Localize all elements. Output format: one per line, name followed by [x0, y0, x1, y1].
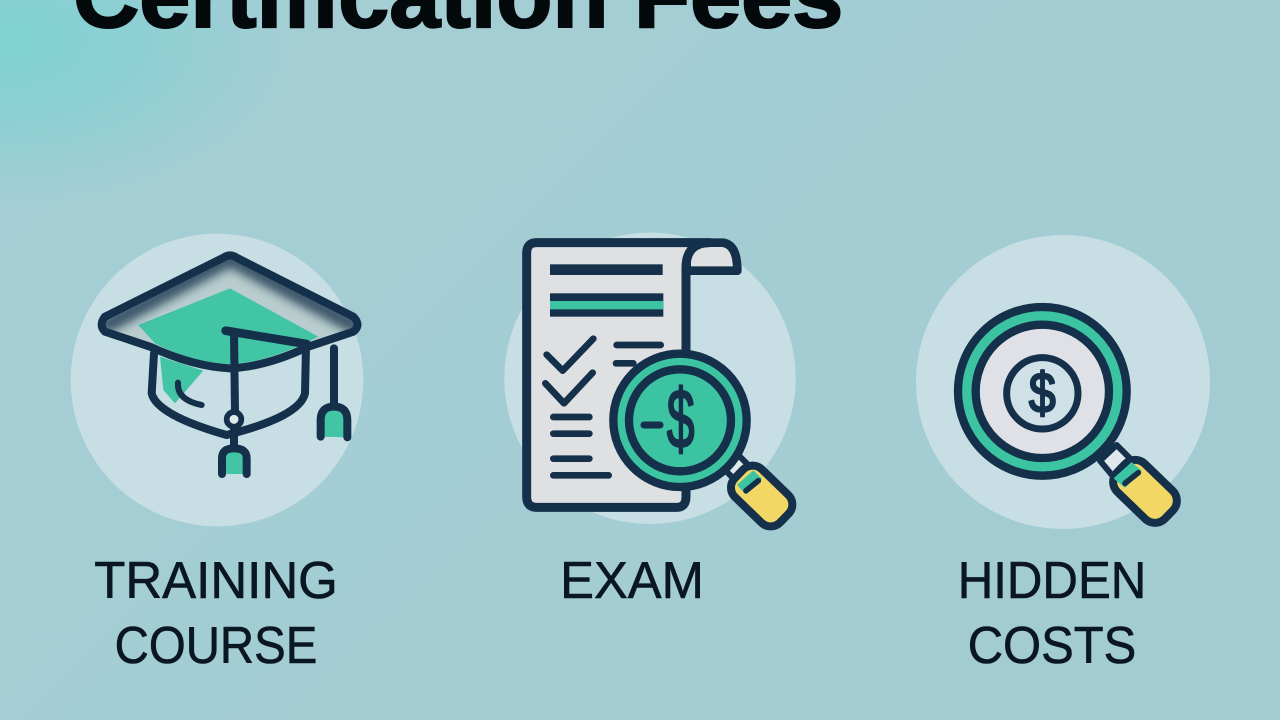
label: hidden costs: COSTS	[968, 616, 1136, 674]
icon: graduation cap	[71, 234, 363, 526]
icon: exam document with magnifier	[504, 233, 798, 532]
magnifier lens: $	[667, 372, 695, 466]
icons	[70, 232, 1210, 530]
icon: magnifier with coin	[916, 235, 1210, 529]
magnifier lens	[613, 354, 747, 487]
label: hidden costs	[958, 551, 1146, 674]
label: exam: EXAM	[560, 551, 704, 609]
label: hidden costs: HIDDEN	[958, 551, 1146, 609]
magnifier handle	[723, 455, 798, 532]
label: training course: TRAINING	[94, 551, 338, 609]
document lines	[545, 264, 663, 475]
label: training course	[94, 551, 338, 674]
icon: magnifier with coin: $	[1029, 362, 1056, 426]
label: training course: COURSE	[115, 616, 317, 674]
